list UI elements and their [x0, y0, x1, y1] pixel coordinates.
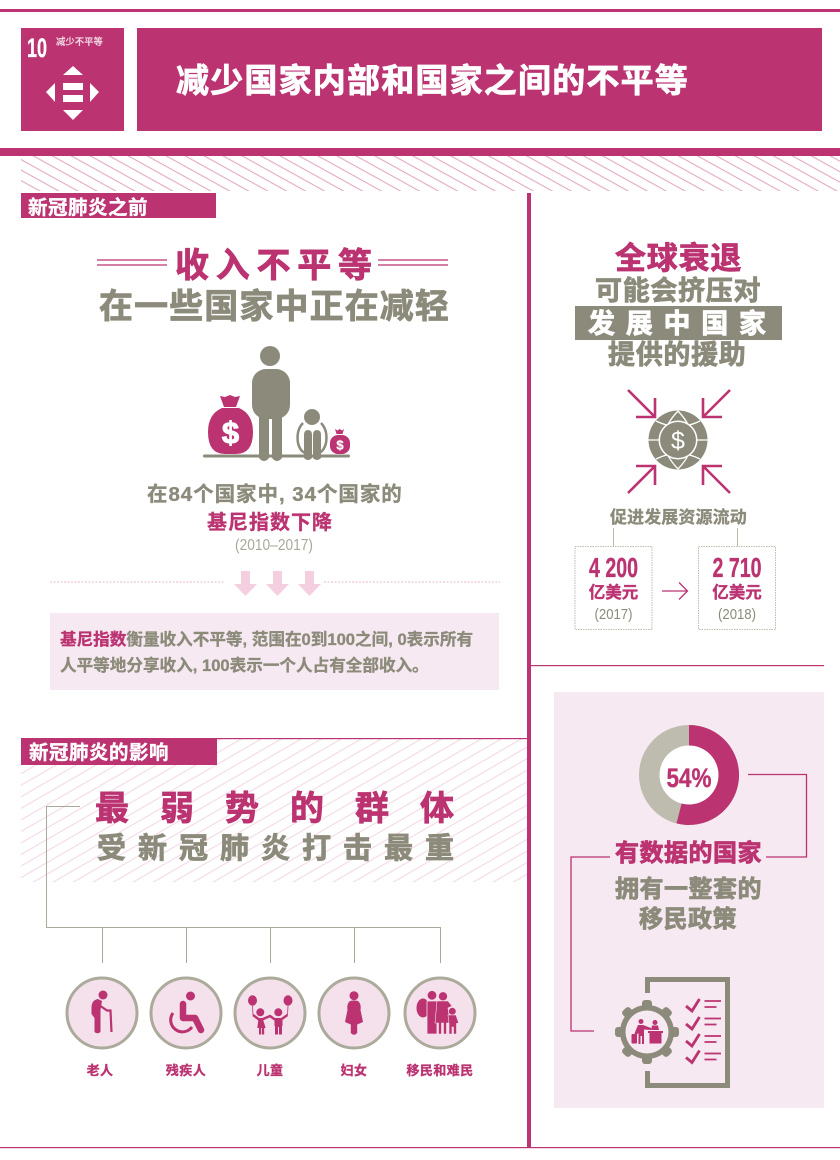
heading: global recession: 可能会挤压对	[595, 276, 761, 306]
icon: shrinking global finance: $	[671, 427, 685, 455]
value box 2017: 亿美元	[589, 582, 638, 602]
section tag: impact of COVID-19: 新冠肺炎的影响	[29, 742, 169, 764]
group labels: 老人	[87, 1063, 113, 1078]
icon: rich and poor figures with money bags: $	[222, 415, 239, 450]
icon: migrants and refugees	[405, 978, 475, 1048]
resource flows comparison: 促进发展资源流动	[610, 507, 747, 527]
icon: women	[319, 978, 389, 1048]
heading: income inequality: 在一些国家中正在减轻	[99, 288, 450, 326]
arrow	[662, 582, 688, 600]
donut chart: 54%: 54%	[666, 763, 712, 793]
donut chart: 54%	[639, 725, 739, 825]
icon: shrinking global finance	[628, 390, 730, 493]
section tag: impact of COVID-19	[21, 738, 527, 882]
goal 10 badge	[21, 28, 124, 131]
section tag: before COVID-19	[21, 193, 216, 219]
heading: global recession: 全球衰退	[615, 241, 742, 276]
heading: most vulnerable groups: 受新冠肺炎打击最重	[97, 832, 466, 865]
icon: older persons	[67, 978, 137, 1048]
goal 10 badge: 10	[27, 33, 47, 63]
heading: income inequality	[97, 247, 450, 326]
heading: most vulnerable groups	[95, 790, 485, 865]
group labels: 移民和难民	[406, 1063, 474, 1078]
icon: rich and poor figures with money bags	[203, 346, 350, 461]
bracket connector	[46, 806, 440, 963]
heading: global recession: 发展中国家	[588, 309, 777, 339]
icon: children	[235, 978, 305, 1048]
group labels: 儿童	[257, 1063, 283, 1078]
icon: persons with disabilities	[151, 978, 221, 1048]
group labels: 妇女	[341, 1063, 367, 1078]
callout: Gini definition: 基尼指数衡量收入不平等, 范围在0到100之间, 0表示所有	[60, 629, 473, 649]
value box 2018: 2 710	[712, 552, 762, 583]
value box 2017: (2017)	[594, 606, 633, 623]
section tag: before COVID-19: 新冠肺炎之前	[28, 196, 148, 219]
dashed divider with down arrows	[50, 571, 500, 596]
title: 减少国家内部和国家之间的不平等	[176, 62, 689, 99]
heading: global recession: 提供的援助	[608, 340, 746, 370]
panel: migration policy	[554, 692, 824, 1108]
value box 2017: 4 200	[589, 552, 638, 583]
heading: global recession	[575, 241, 782, 370]
policy text: 移民政策	[639, 906, 737, 933]
text: Gini index statistic: (2010–2017)	[235, 537, 313, 554]
callout: Gini definition: 人平等地分享收入, 100表示一个人占有全部收入。	[60, 655, 429, 675]
heading: most vulnerable groups: 最弱势的群体	[95, 790, 485, 828]
title	[137, 28, 822, 131]
goal 10 badge: 减少不平等	[56, 36, 103, 47]
policy text: 有数据的国家	[615, 840, 762, 867]
value box 2018	[698, 546, 776, 630]
value box 2018: 亿美元	[712, 582, 762, 602]
policy text	[615, 840, 762, 933]
group labels: 残疾人	[166, 1063, 206, 1078]
connector lines	[571, 774, 806, 1031]
text: Gini index statistic: 在84个国家中, 34个国家的	[147, 482, 403, 506]
group labels	[87, 1063, 474, 1078]
resource flows comparison	[575, 507, 776, 630]
policy text: 拥有一整套的	[615, 876, 762, 903]
header band	[0, 9, 840, 191]
value box 2018: (2018)	[718, 606, 756, 623]
text: Gini index statistic: 基尼指数下降	[207, 511, 333, 534]
icon: rich and poor figures with money bags: $	[336, 438, 344, 452]
heading: income inequality: 收入不平等	[175, 247, 379, 285]
text: Gini index statistic	[147, 482, 403, 554]
callout: Gini definition	[50, 613, 499, 690]
icon: policy checklist with gear	[615, 980, 728, 1086]
value box 2017	[575, 546, 652, 630]
